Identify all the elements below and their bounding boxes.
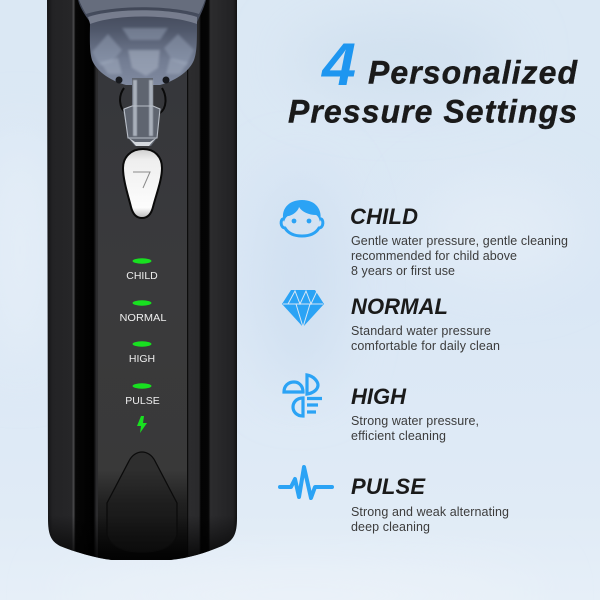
- icon: pulse wave: [280, 467, 332, 498]
- description: normal: comfortable for daily clean: [351, 339, 500, 353]
- title: Pressure Settings: [288, 94, 577, 130]
- description: child: Gentle water pressure, gentle cleaning: [351, 234, 568, 248]
- heading: pulse: PULSE: [351, 474, 426, 499]
- item: child: [281, 200, 568, 278]
- centre panel: [98, 0, 187, 560]
- description: high: Strong water pressure,: [351, 414, 479, 428]
- indicator: normal: NORMAL: [120, 312, 167, 324]
- heading: high: HIGH: [351, 384, 407, 409]
- item: pulse: [280, 467, 509, 534]
- nozzle: [120, 88, 166, 113]
- description: normal: Standard water pressure: [351, 324, 491, 338]
- indicator: high: [129, 341, 155, 365]
- lower button: [107, 452, 177, 552]
- indicator: normal: [120, 300, 167, 324]
- title: Personalized: [368, 54, 578, 90]
- icon: green bolt: [137, 416, 147, 433]
- description: high: efficient cleaning: [351, 429, 446, 443]
- water tank and nozzle: [78, 0, 206, 146]
- description: pulse: deep cleaning: [351, 520, 430, 534]
- heading: child: CHILD: [350, 204, 418, 229]
- item: normal: [282, 290, 500, 353]
- indicator: pulse: PULSE: [125, 395, 160, 407]
- title: [288, 31, 578, 130]
- description: child: recommended for child above: [351, 249, 517, 263]
- description: child: 8 years or first use: [351, 264, 455, 278]
- item: high: [284, 375, 479, 443]
- mode indicators: [120, 258, 167, 433]
- icon: diamond: [282, 290, 324, 327]
- indicator: pulse: [125, 383, 160, 407]
- indicator: child: [126, 258, 158, 282]
- indicator: high: HIGH: [129, 353, 155, 365]
- description: pulse: Strong and weak alternating: [351, 505, 509, 519]
- device body: [47, 0, 237, 560]
- title: 4: [321, 31, 356, 98]
- heading: normal: NORMAL: [351, 294, 448, 319]
- power button: [123, 149, 162, 218]
- icon: child face: [281, 200, 323, 236]
- icon: water jets: [284, 375, 322, 416]
- indicator: child: CHILD: [126, 270, 158, 282]
